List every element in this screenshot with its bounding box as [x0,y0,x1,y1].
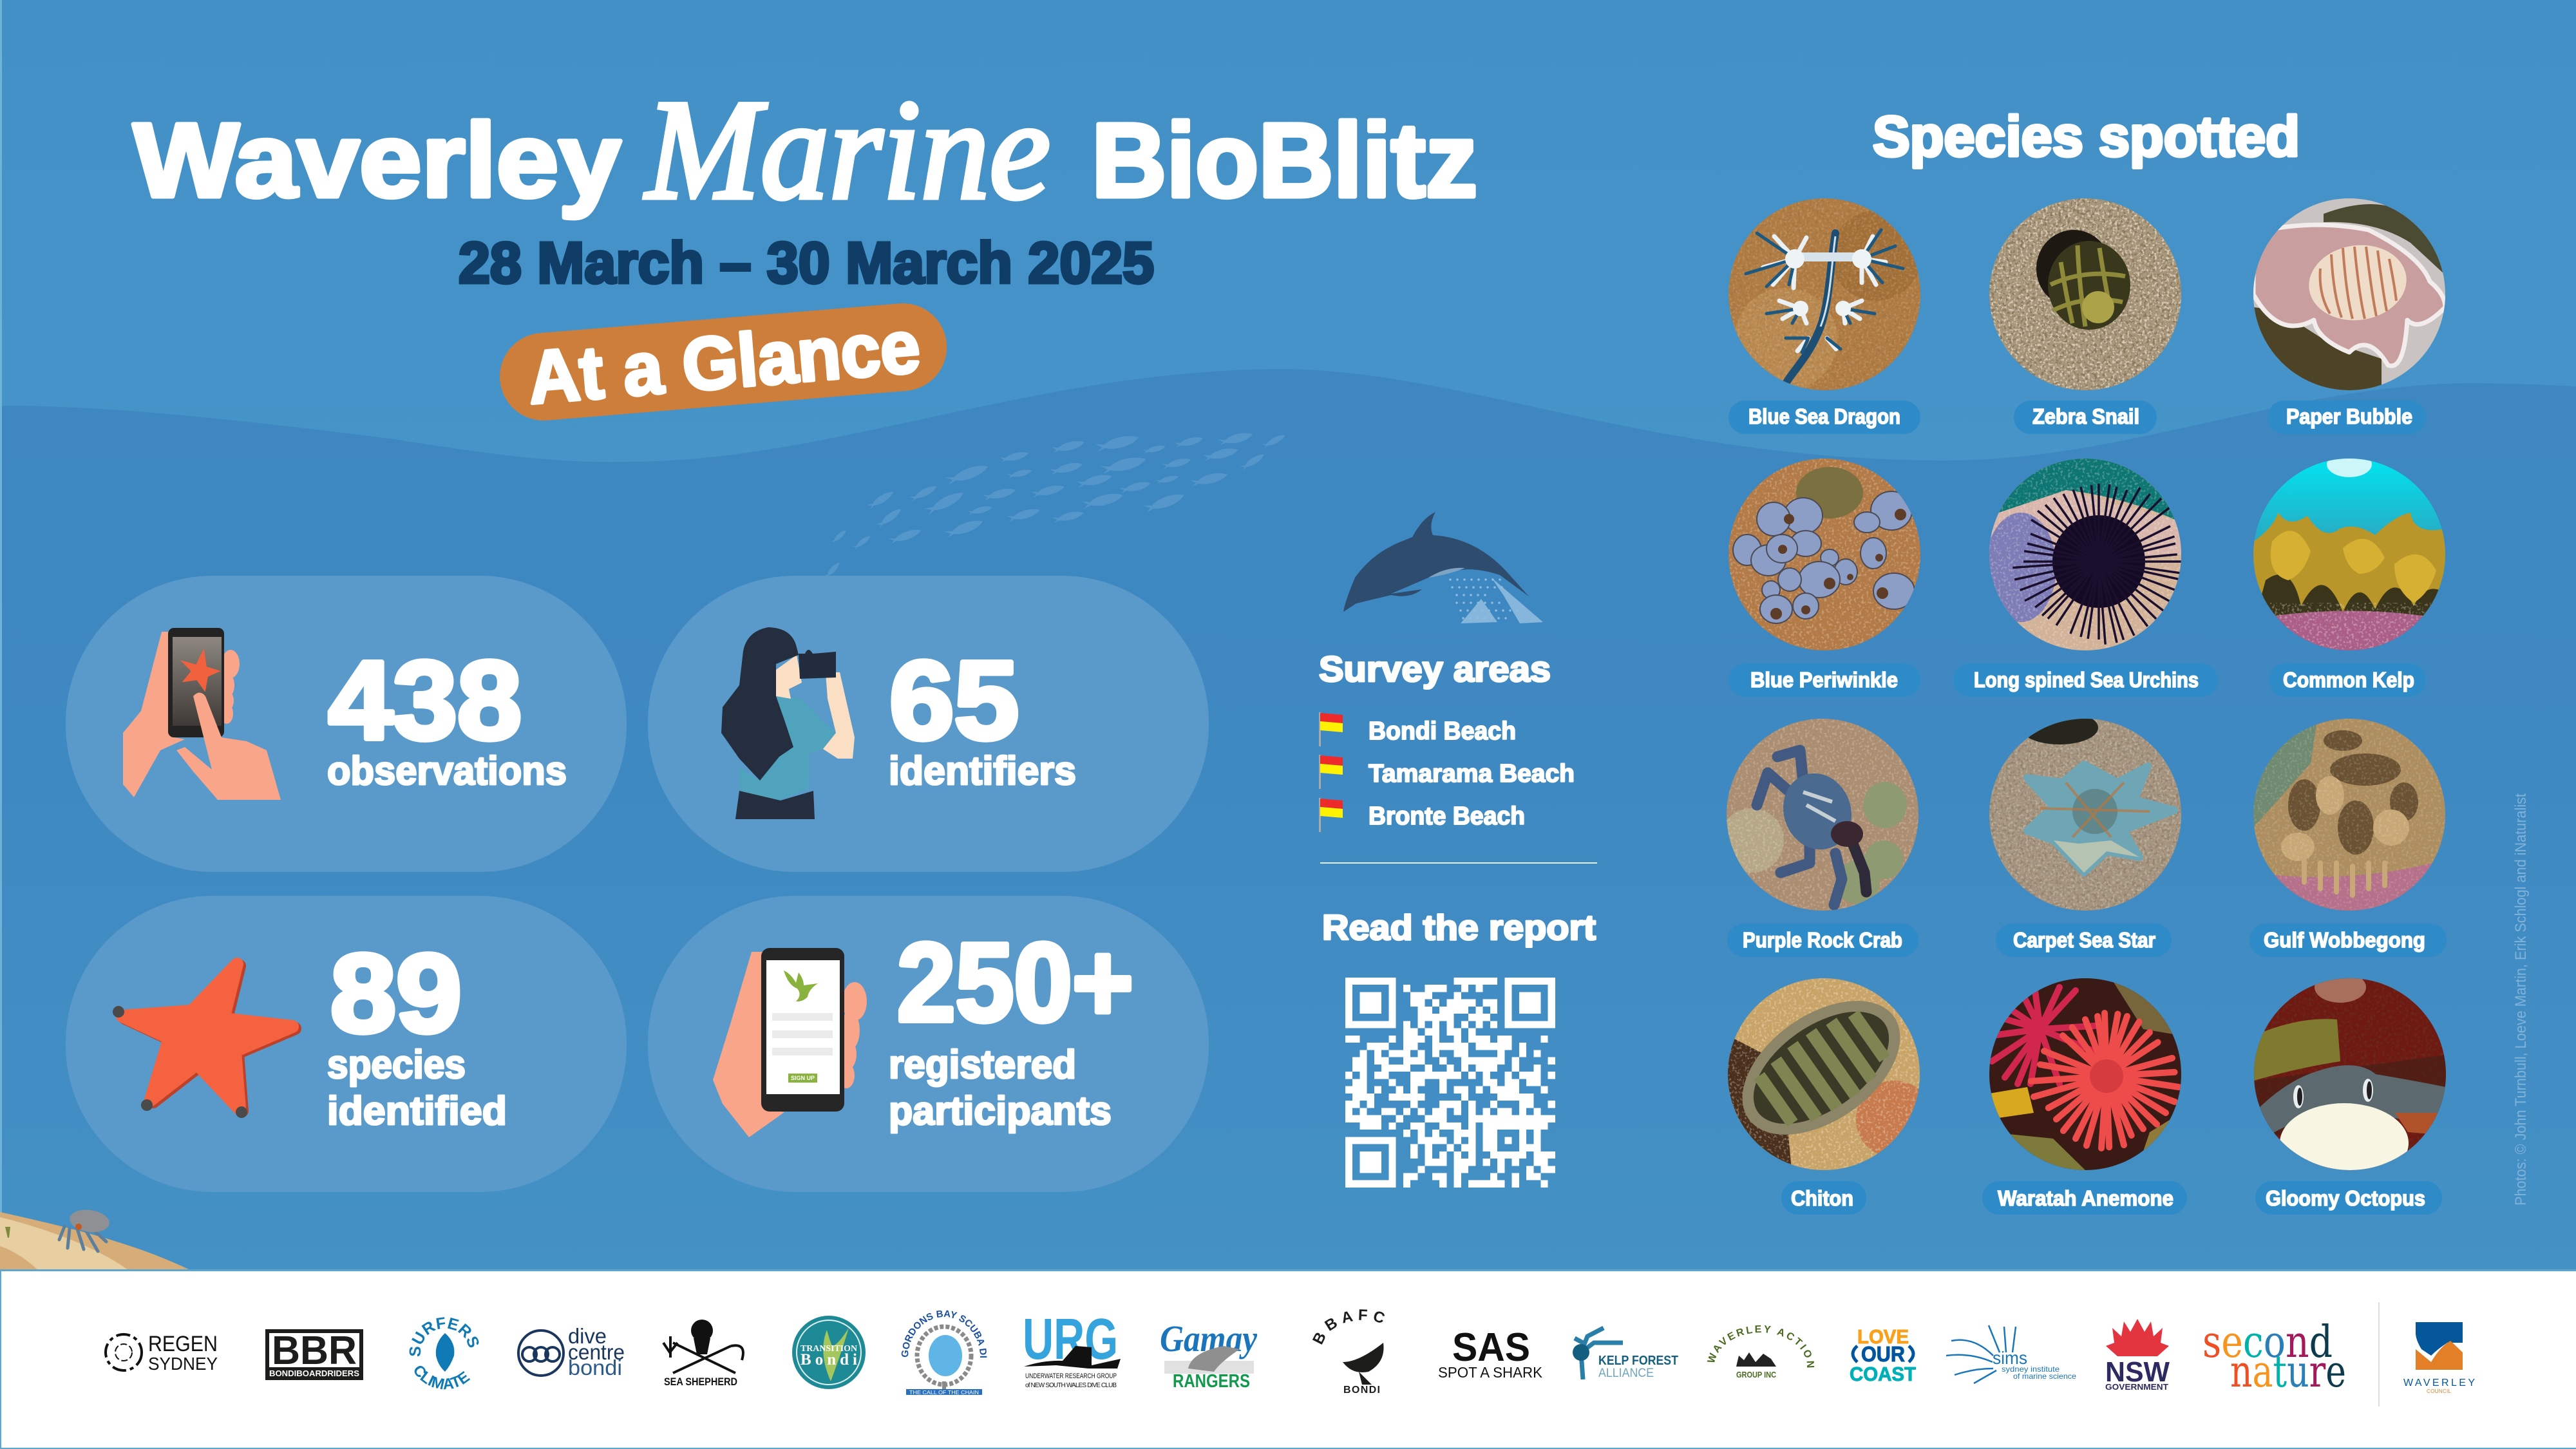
logo: Transition Bondi: Bondi [800,1351,857,1368]
list: survey beaches [1319,712,1575,832]
logo: Waverley Action Group: WAVERLEY ACTION [1707,1325,1815,1368]
logo: Love Our Coast: LOVE [1857,1325,1909,1348]
label pill: Blue Sea Dragon [1748,404,1900,428]
value: 438: 438 [328,638,522,762]
heading: species spotted: Species spotted [1873,104,2300,168]
photo credit: Photos: © John Turnbull, Loeve Martin, Erik Schlogl and iNaturalist [2512,793,2530,1206]
panel: observations [66,576,627,872]
logo: Spot A Shark [1438,1325,1543,1381]
logo: Sydney Institute of Marine Science: sydney institute [2002,1365,2060,1374]
label: species identified [327,1043,507,1133]
logo: Underwater Research Group: URG [1023,1307,1118,1372]
species: Common Kelp [2253,451,2445,697]
value: 89: 89 [330,931,462,1056]
logo: Waverley Council: COUNCIL [2427,1388,2452,1394]
species: Gulf Wobbegong [2249,719,2447,957]
species: Zebra Snail [1989,198,2181,434]
label pill [2249,923,2447,957]
value: 250+: 250+ [897,920,1133,1045]
logo: BBAFC Bondi: BBAFC [1312,1309,1385,1345]
label pill: Waratah Anemone [1998,1186,2174,1210]
logo: Gordons Bay Scuba Diving Club: THE CALL OF THE CHAIN [909,1390,979,1396]
label: registered participants [889,1043,1112,1133]
label: species identified: identified [327,1089,507,1133]
value: 65: 65 [889,638,1019,762]
logo: Love Our Coast: OUR [1861,1342,1905,1366]
logo: Sydney Institute of Marine Science: of marine science [2013,1372,2076,1381]
species: Paper Bubble [2253,198,2445,434]
logo: second nature: second [2202,1317,2333,1368]
label pill [1781,1181,1866,1215]
title: Waverley Marine BioBlitz: BioBlitz [1092,101,1477,219]
logo: Spot A Shark: SAS [1452,1325,1530,1370]
logo: NSW Government [2105,1319,2170,1392]
qr code [1345,978,1555,1188]
logo: dive centre bondi: bondi [568,1356,622,1379]
logo: Transition Bondi [792,1316,866,1389]
label: observations: observations [327,749,567,793]
label pill [1728,401,1920,434]
icon: flag [1319,755,1343,789]
logo: NSW Government: NSW [2105,1356,2170,1388]
logo: Gordons Bay Scuba Diving Club: GORDONS BAY SCUBA DIVING CLUB [902,1310,987,1358]
logo: BBAFC Bondi [1312,1309,1385,1396]
logo: Gamay Rangers: Gamay [1160,1318,1257,1359]
logo: Gordons Bay Scuba Diving Club [902,1310,987,1396]
species: Gloomy Octopus [2254,972,2446,1215]
species: Chiton [1718,974,1933,1215]
label pill: Purple Rock Crab [1743,928,1902,952]
panel: registered participants [648,896,1209,1192]
label pill [1727,923,1918,957]
label pill [1996,923,2172,957]
label pill [1728,663,1920,697]
logo: Surfers for Climate: CLIMATE [415,1365,470,1390]
logo: Waverley Action Group: GROUP INC [1736,1370,1777,1379]
logo: Underwater Research Group [1023,1307,1121,1389]
label: registered participants: participants [889,1089,1112,1133]
label pill [2268,401,2426,434]
text: Tamarama Beach: Tamarama Beach [1368,760,1575,788]
logo: Gamay Rangers [1160,1318,1257,1392]
photo: long spined sea urchin [1985,459,2193,654]
logo: second nature [2202,1317,2346,1397]
label pill: Gulf Wobbegong [2264,928,2425,952]
panel: species identified [66,896,627,1192]
logo: NSW Government: GOVERNMENT [2105,1382,2168,1392]
logo: Transition Bondi: TRANSITION [800,1344,857,1354]
title: Waverley Marine BioBlitz: Waverley [133,101,621,219]
icon: hands with phone [123,628,281,800]
logo: Bondi Boardriders: BBR [272,1329,357,1373]
panel: identifiers [648,576,1209,872]
icon: hand holding phone: SIGN UP [791,1075,815,1081]
text: Bronte Beach: Bronte Beach [1368,802,1525,830]
species: Waratah Anemone [1982,978,2190,1215]
label: species identified: species [327,1043,466,1087]
logo: Kelp Forest Alliance: KELP FOREST [1598,1354,1678,1368]
photo: zebra snail [1989,198,2181,390]
logo: dive centre bondi: dive [568,1324,607,1348]
logo: Underwater Research Group: UNDERWATER RESEARCH GROUP [1025,1372,1117,1380]
text: Bondi Beach: Bondi Beach [1368,717,1516,745]
at a glance badge: At a Glance [525,304,923,420]
icon: woman with camera [721,627,855,819]
logo: Sea Shepherd: SEA SHEPHERD [664,1376,737,1388]
logo: Love Our Coast [1850,1325,1916,1385]
photo: chiton [1718,974,1933,1170]
logo: Surfers for Climate: SURFERS [410,1317,479,1356]
logo: Kelp Forest Alliance [1573,1328,1678,1380]
label pill: Chiton [1791,1186,1853,1210]
photo: gulf wobbegong [2253,719,2445,911]
label pill [1953,663,2218,697]
label pill: Paper Bubble [2286,404,2412,428]
label pill: Blue Periwinkle [1750,668,1898,692]
label pill: Carpet Sea Star [2013,928,2155,952]
photo: carpet sea star [1989,711,2181,911]
label pill [2014,401,2157,434]
title: Waverley Marine BioBlitz: Marine [644,71,1050,229]
species: Blue Sea Dragon [1728,198,1921,434]
heading: read the report: Read the report [1322,907,1596,947]
species: Blue Periwinkle [1728,459,1920,697]
date heading: 28 March – 30 March 2025 [459,231,1154,296]
logo: Waverley Council: WAVERLEY [2403,1378,2475,1388]
photo: common kelp [2253,451,2445,650]
label pill: Zebra Snail [2032,404,2139,428]
logo: Regen Sydney [106,1332,218,1374]
logo: Love Our Coast: COAST [1850,1363,1916,1385]
icon: flag [1319,712,1343,746]
photo: waratah anemone [1989,978,2190,1170]
logo: Regen Sydney: REGEN [148,1332,218,1356]
logo: second nature: nature [2230,1347,2346,1397]
icon: starfish [113,964,295,1118]
logo: Sydney Institute of Marine Science [1946,1325,2076,1383]
species: Long spined Sea Urchins [1953,459,2218,697]
label: registered participants: registered [889,1043,1076,1087]
species: Purple Rock Crab [1719,719,1918,957]
label: identifiers: identifiers [889,749,1076,793]
photo: paper bubble [2253,198,2445,390]
photo: purple rock crab [1719,719,1918,911]
label pill: Gloomy Octopus [2266,1186,2425,1210]
logo: Surfers for Climate [410,1317,479,1390]
logo: Gamay Rangers: RANGERS [1173,1371,1250,1392]
logo: Underwater Research Group: of NEW SOUTH WALES DIVE CLUB [1025,1382,1117,1389]
icon: hermit crab [59,1208,111,1251]
heading: survey areas: Survey areas [1319,649,1551,689]
logo: dive centre bondi [518,1324,625,1379]
logo: Waverley Council [2403,1322,2475,1394]
icon: flag [1319,798,1343,832]
fish school [823,431,1287,580]
label pill: Common Kelp [2283,668,2414,692]
logo: Regen Sydney: SYDNEY [148,1354,218,1374]
label pill [1982,1181,2187,1215]
icon: hand holding phone [713,948,867,1137]
logo: dive centre bondi: centre [568,1340,625,1364]
sand bank with hermit crab [0,1208,191,1271]
photo: blue sea dragon [1728,198,1921,391]
logo: Bondi Boardriders: BONDIBOARDRIDERS [269,1368,359,1378]
title: Waverley Marine BioBlitz [133,71,1477,229]
logo: Spot A Shark: SPOT A SHARK [1438,1364,1543,1381]
logo: BBAFC Bondi: BONDI [1343,1385,1380,1396]
logo: Sea Shepherd [663,1320,743,1388]
label pill [2255,1181,2442,1215]
icon: jumping dolphin [1343,512,1543,623]
logo: Sydney Institute of Marine Science: sims [1993,1348,2027,1368]
label pill: Long spined Sea Urchins [1974,668,2199,692]
label pill [2269,663,2426,697]
species: Carpet Sea Star [1989,711,2181,957]
photo: blue periwinkle [1728,459,1920,650]
photo: gloomy octopus [2254,972,2446,1183]
logo: Kelp Forest Alliance: ALLIANCE [1598,1367,1654,1380]
